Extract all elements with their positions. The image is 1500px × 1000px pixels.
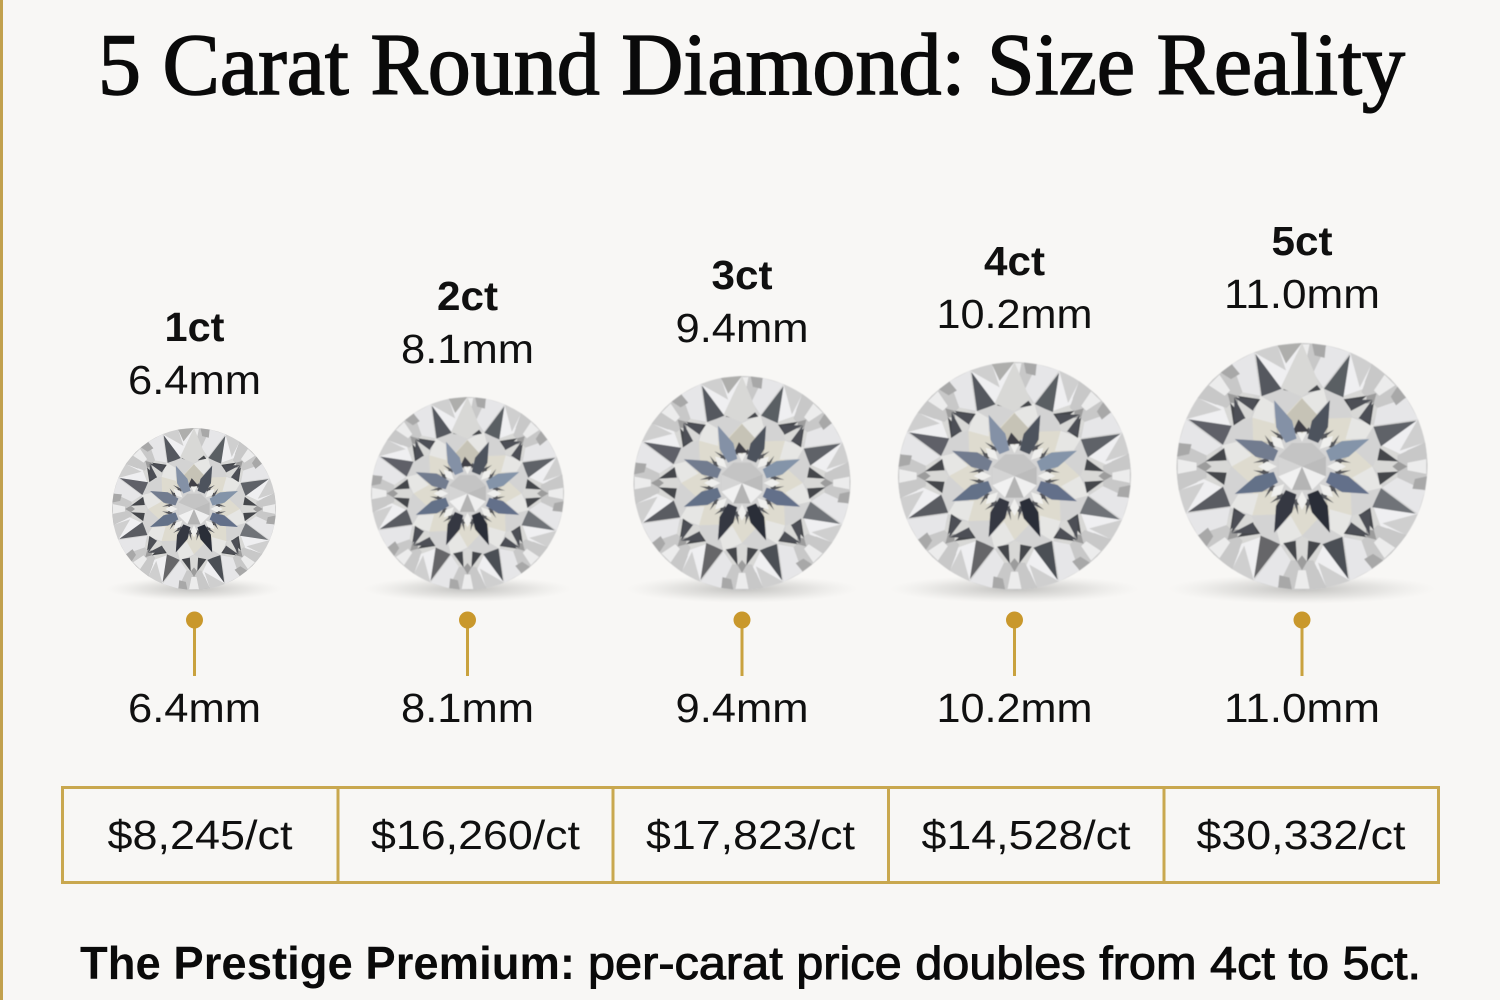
diameter label: 1ct: 6.4mm bbox=[128, 685, 261, 731]
column: 3ct bbox=[611, 252, 873, 731]
takeaway text: per-carat price doubles from 4ct to 5ct. bbox=[588, 937, 1421, 989]
label: 3ct size: 3ct bbox=[712, 252, 773, 298]
pin marker: 4ct bbox=[1006, 612, 1023, 676]
label: 4ct size bbox=[936, 238, 1092, 337]
column: 5ct bbox=[1151, 218, 1453, 731]
price: 1ct: $8,245/ct bbox=[108, 812, 293, 858]
label: 5ct size: 5ct bbox=[1272, 218, 1333, 264]
column: 2ct bbox=[351, 273, 584, 731]
price: 2ct: $16,260/ct bbox=[371, 812, 581, 858]
label: 2ct size: 8.1mm bbox=[401, 326, 534, 372]
pin marker: 5ct bbox=[1294, 612, 1310, 676]
column: 1ct bbox=[95, 304, 293, 731]
diameter label: 4ct: 10.2mm bbox=[936, 685, 1092, 731]
diameter label: 2ct: 8.1mm bbox=[401, 685, 534, 731]
title: 5 Carat Round Diamond: Size Reality bbox=[98, 17, 1405, 114]
diamond: 5ct bbox=[1151, 317, 1453, 616]
diamond: 3ct bbox=[611, 354, 873, 612]
label: 1ct size bbox=[128, 304, 261, 403]
label: 1ct size: 6.4mm bbox=[128, 357, 261, 403]
diamond: 1ct bbox=[95, 411, 293, 607]
diamond: 2ct bbox=[351, 377, 584, 610]
label: 2ct size bbox=[401, 273, 534, 372]
label: 4ct size: 10.2mm bbox=[936, 291, 1092, 337]
label: 2ct size: 2ct bbox=[437, 273, 498, 319]
pin marker: 1ct bbox=[186, 612, 203, 676]
takeaway text: The Prestige Premium: bbox=[80, 937, 575, 989]
pin marker: 2ct bbox=[459, 612, 476, 676]
price: 4ct: $14,528/ct bbox=[922, 812, 1131, 858]
diamond: 4ct bbox=[874, 338, 1155, 614]
diameter label: 3ct: 9.4mm bbox=[676, 685, 808, 731]
left gold border bbox=[0, 0, 3, 1000]
label: 5ct size bbox=[1224, 218, 1380, 317]
column: 4ct bbox=[874, 238, 1155, 731]
takeaway text bbox=[80, 937, 1421, 989]
label: 1ct size: 1ct bbox=[164, 304, 225, 350]
price table bbox=[62, 787, 1438, 883]
label: 5ct size: 11.0mm bbox=[1224, 271, 1380, 317]
label: 3ct size: 9.4mm bbox=[676, 305, 808, 351]
price: 5ct: $30,332/ct bbox=[1196, 812, 1406, 858]
label: 3ct size bbox=[676, 252, 808, 351]
price: 3ct: $17,823/ct bbox=[646, 812, 856, 858]
diameter label: 5ct: 11.0mm bbox=[1224, 685, 1380, 731]
label: 4ct size: 4ct bbox=[984, 238, 1045, 284]
pin marker: 3ct bbox=[734, 612, 750, 676]
